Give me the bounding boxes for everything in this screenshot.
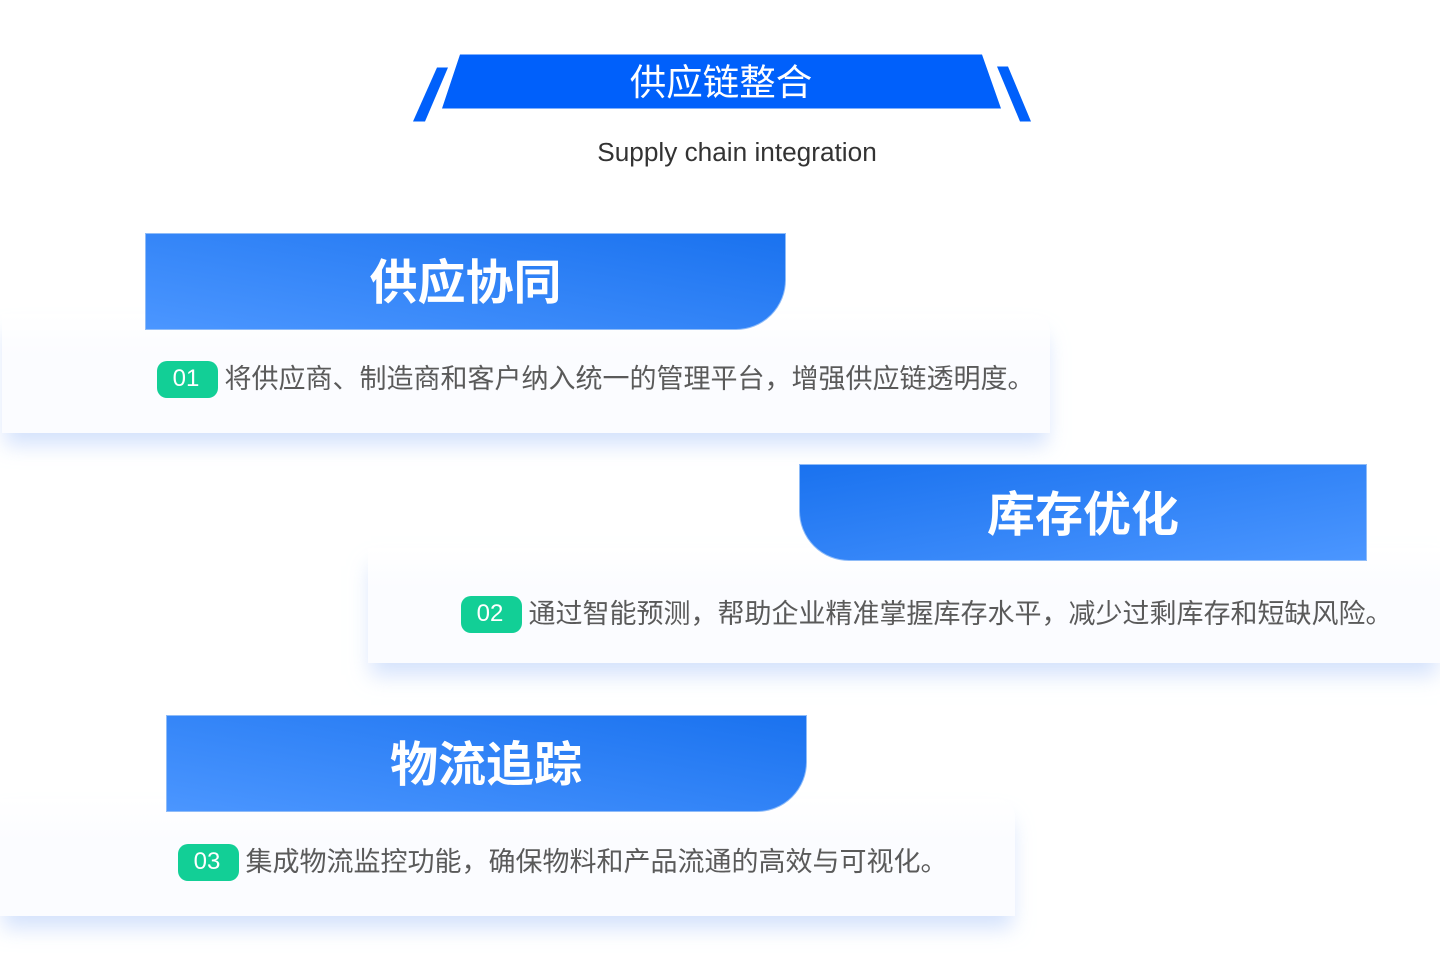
panel: 库存优化 xyxy=(362,464,1440,684)
panel: 物流追踪 xyxy=(0,715,1020,936)
description text: 集成物流监控功能，确保物料和产品流通的高效与可视化。 xyxy=(246,847,948,877)
description text: 将供应商、制造商和客户纳入统一的管理平台，增强供应链透明度。 xyxy=(224,364,1034,394)
number badge xyxy=(157,361,218,398)
number badge xyxy=(461,596,522,632)
number badge: 03 xyxy=(194,848,220,875)
card background xyxy=(368,548,1440,663)
heading banner xyxy=(166,715,806,812)
heading banner xyxy=(145,233,786,330)
heading banner: 物流追踪 xyxy=(390,739,582,792)
number badge xyxy=(178,844,239,880)
card background xyxy=(0,799,1015,916)
heading banner: 库存优化 xyxy=(987,489,1179,542)
number badge: 01 xyxy=(173,365,199,392)
description text: 通过智能预测，帮助企业精准掌握库存水平，减少过剩库存和短缺风险。 xyxy=(528,599,1392,629)
panel: 供应协同 xyxy=(0,233,1056,454)
heading banner: 供应协同 xyxy=(369,257,562,310)
number badge: 02 xyxy=(477,600,503,627)
title banner shapes xyxy=(413,54,1031,122)
header: trapezoid title xyxy=(413,54,1031,122)
title text: 供应链整合 xyxy=(630,62,812,103)
card background xyxy=(2,314,1050,433)
subtitle: Supply chain integration xyxy=(597,137,877,167)
heading banner xyxy=(799,464,1367,561)
